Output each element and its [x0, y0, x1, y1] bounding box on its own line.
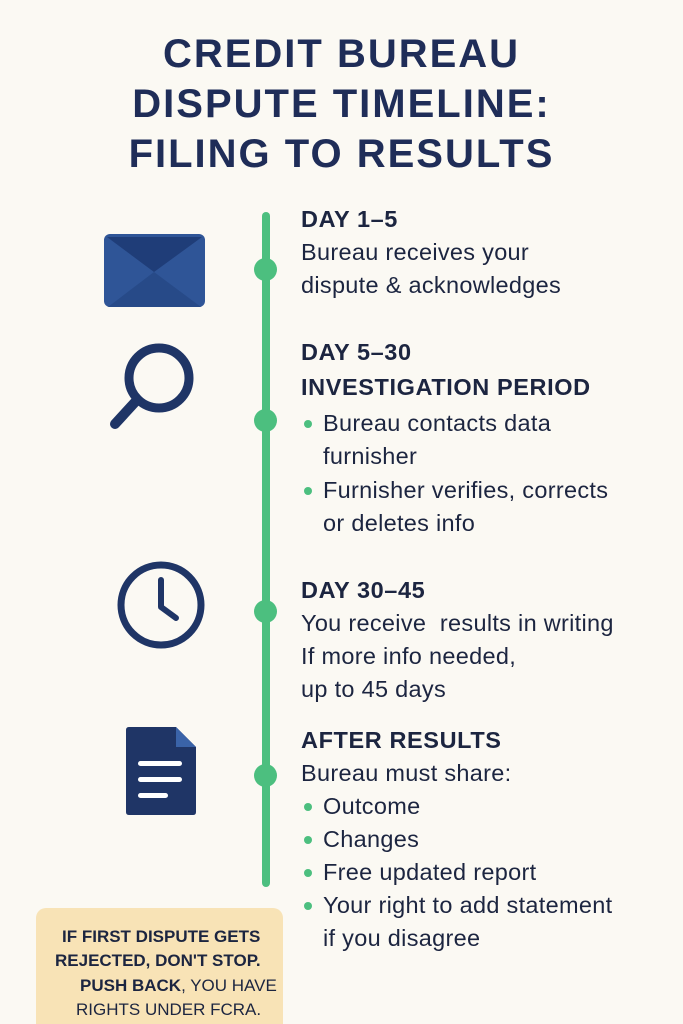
- step: day 5-30: DAY 5–30: [301, 339, 412, 365]
- icon: document: [126, 727, 196, 815]
- timeline dot 2: [254, 409, 277, 432]
- step: after results: AFTER RESULTS: [301, 727, 502, 753]
- icon: clock: [118, 562, 204, 648]
- step: day 30-45: If more info needed,: [301, 643, 516, 669]
- step: after results: Your right to add statement: [323, 892, 612, 918]
- step: day 30-45: You receive results in writing: [301, 610, 614, 636]
- step: after results: Outcome: [323, 793, 420, 819]
- step: after results: if you disagree: [323, 925, 480, 951]
- callout: REJECTED, DON'T STOP.: [55, 951, 261, 970]
- step: day 5-30: Furnisher verifies, corrects: [323, 477, 608, 503]
- step: day 1-5: dispute & acknowledges: [301, 272, 561, 298]
- step: day 5-30: INVESTIGATION PERIOD: [301, 374, 591, 400]
- callout: IF FIRST DISPUTE GETS: [62, 927, 260, 946]
- timeline dot 3: [254, 600, 277, 623]
- step: day 1-5: DAY 1–5: [301, 206, 398, 232]
- step: after results: Changes: [323, 826, 419, 852]
- callout: PUSH BACK, YOU HAVE: [80, 976, 277, 995]
- title: CREDIT BUREAU: [163, 32, 520, 76]
- title: DISPUTE TIMELINE:: [132, 82, 551, 126]
- title: FILING TO RESULTS: [129, 132, 554, 176]
- title: [129, 32, 554, 176]
- step: day 1-5: Bureau receives your: [301, 239, 529, 265]
- step: day 30-45: up to 45 days: [301, 676, 446, 702]
- step: day 1-5: [301, 206, 561, 298]
- icon: magnifier: [110, 344, 194, 429]
- icon: envelope: [104, 234, 205, 307]
- timeline line: [262, 212, 270, 887]
- step: day 5-30: or deletes info: [323, 510, 475, 536]
- timeline dot 1: [254, 258, 277, 281]
- step: after results: Free updated report: [323, 859, 536, 885]
- step: after results: Bureau must share:: [301, 760, 511, 786]
- step: day 5-30: furnisher: [323, 443, 417, 469]
- step: day 30-45: [301, 577, 614, 702]
- callout: [36, 908, 283, 1024]
- step: day 5-30: Bureau contacts data: [323, 410, 551, 436]
- step: day 30-45: DAY 30–45: [301, 577, 425, 603]
- step: after results: [301, 727, 612, 951]
- callout: RIGHTS UNDER FCRA.: [76, 1000, 261, 1019]
- timeline dot 4: [254, 764, 277, 787]
- step: day 5-30: [301, 339, 608, 536]
